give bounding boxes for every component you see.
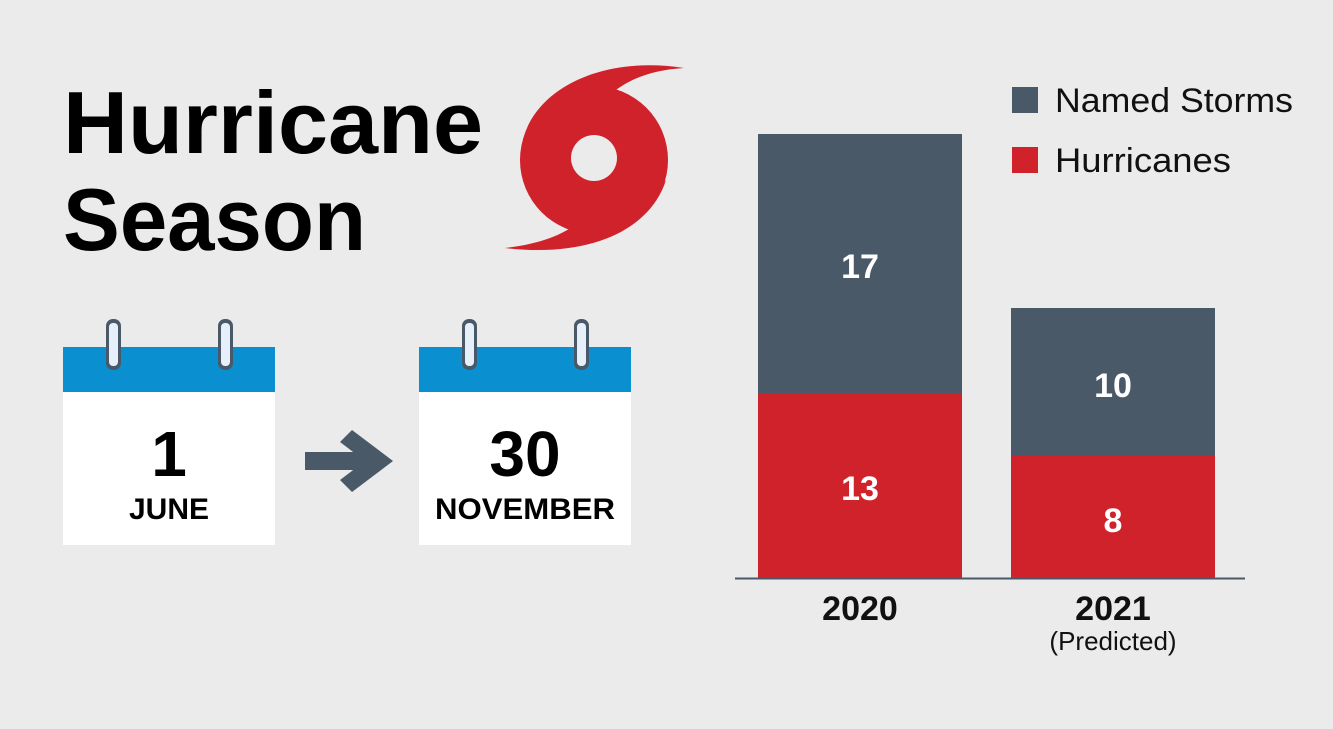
legend: Named Storms	[1055, 82, 1293, 120]
icon: hurricane symbol	[505, 65, 684, 250]
calendar: 1 June: JUNE	[129, 493, 209, 526]
bar chart	[735, 134, 1245, 656]
legend	[1012, 82, 1293, 180]
bar chart: 17	[841, 248, 879, 286]
title: Season	[63, 170, 366, 269]
calendar: 30 November	[419, 319, 631, 545]
title	[63, 73, 483, 269]
bar chart: (Predicted)	[1049, 626, 1177, 656]
bar chart: 8	[1104, 502, 1122, 540]
calendar: 1 June: 1	[151, 418, 187, 490]
calendar: 30 November: NOVEMBER	[435, 493, 615, 526]
arrow	[305, 430, 393, 492]
calendar: 1 June	[63, 319, 275, 545]
title: Hurricane	[63, 73, 483, 172]
bar chart: 2020	[822, 590, 898, 628]
bar chart: 13	[841, 470, 879, 508]
calendar: 30 November: 30	[489, 418, 561, 490]
legend: Hurricanes	[1055, 142, 1231, 180]
bar chart: 10	[1094, 367, 1132, 405]
bar chart: 2021	[1075, 590, 1151, 628]
